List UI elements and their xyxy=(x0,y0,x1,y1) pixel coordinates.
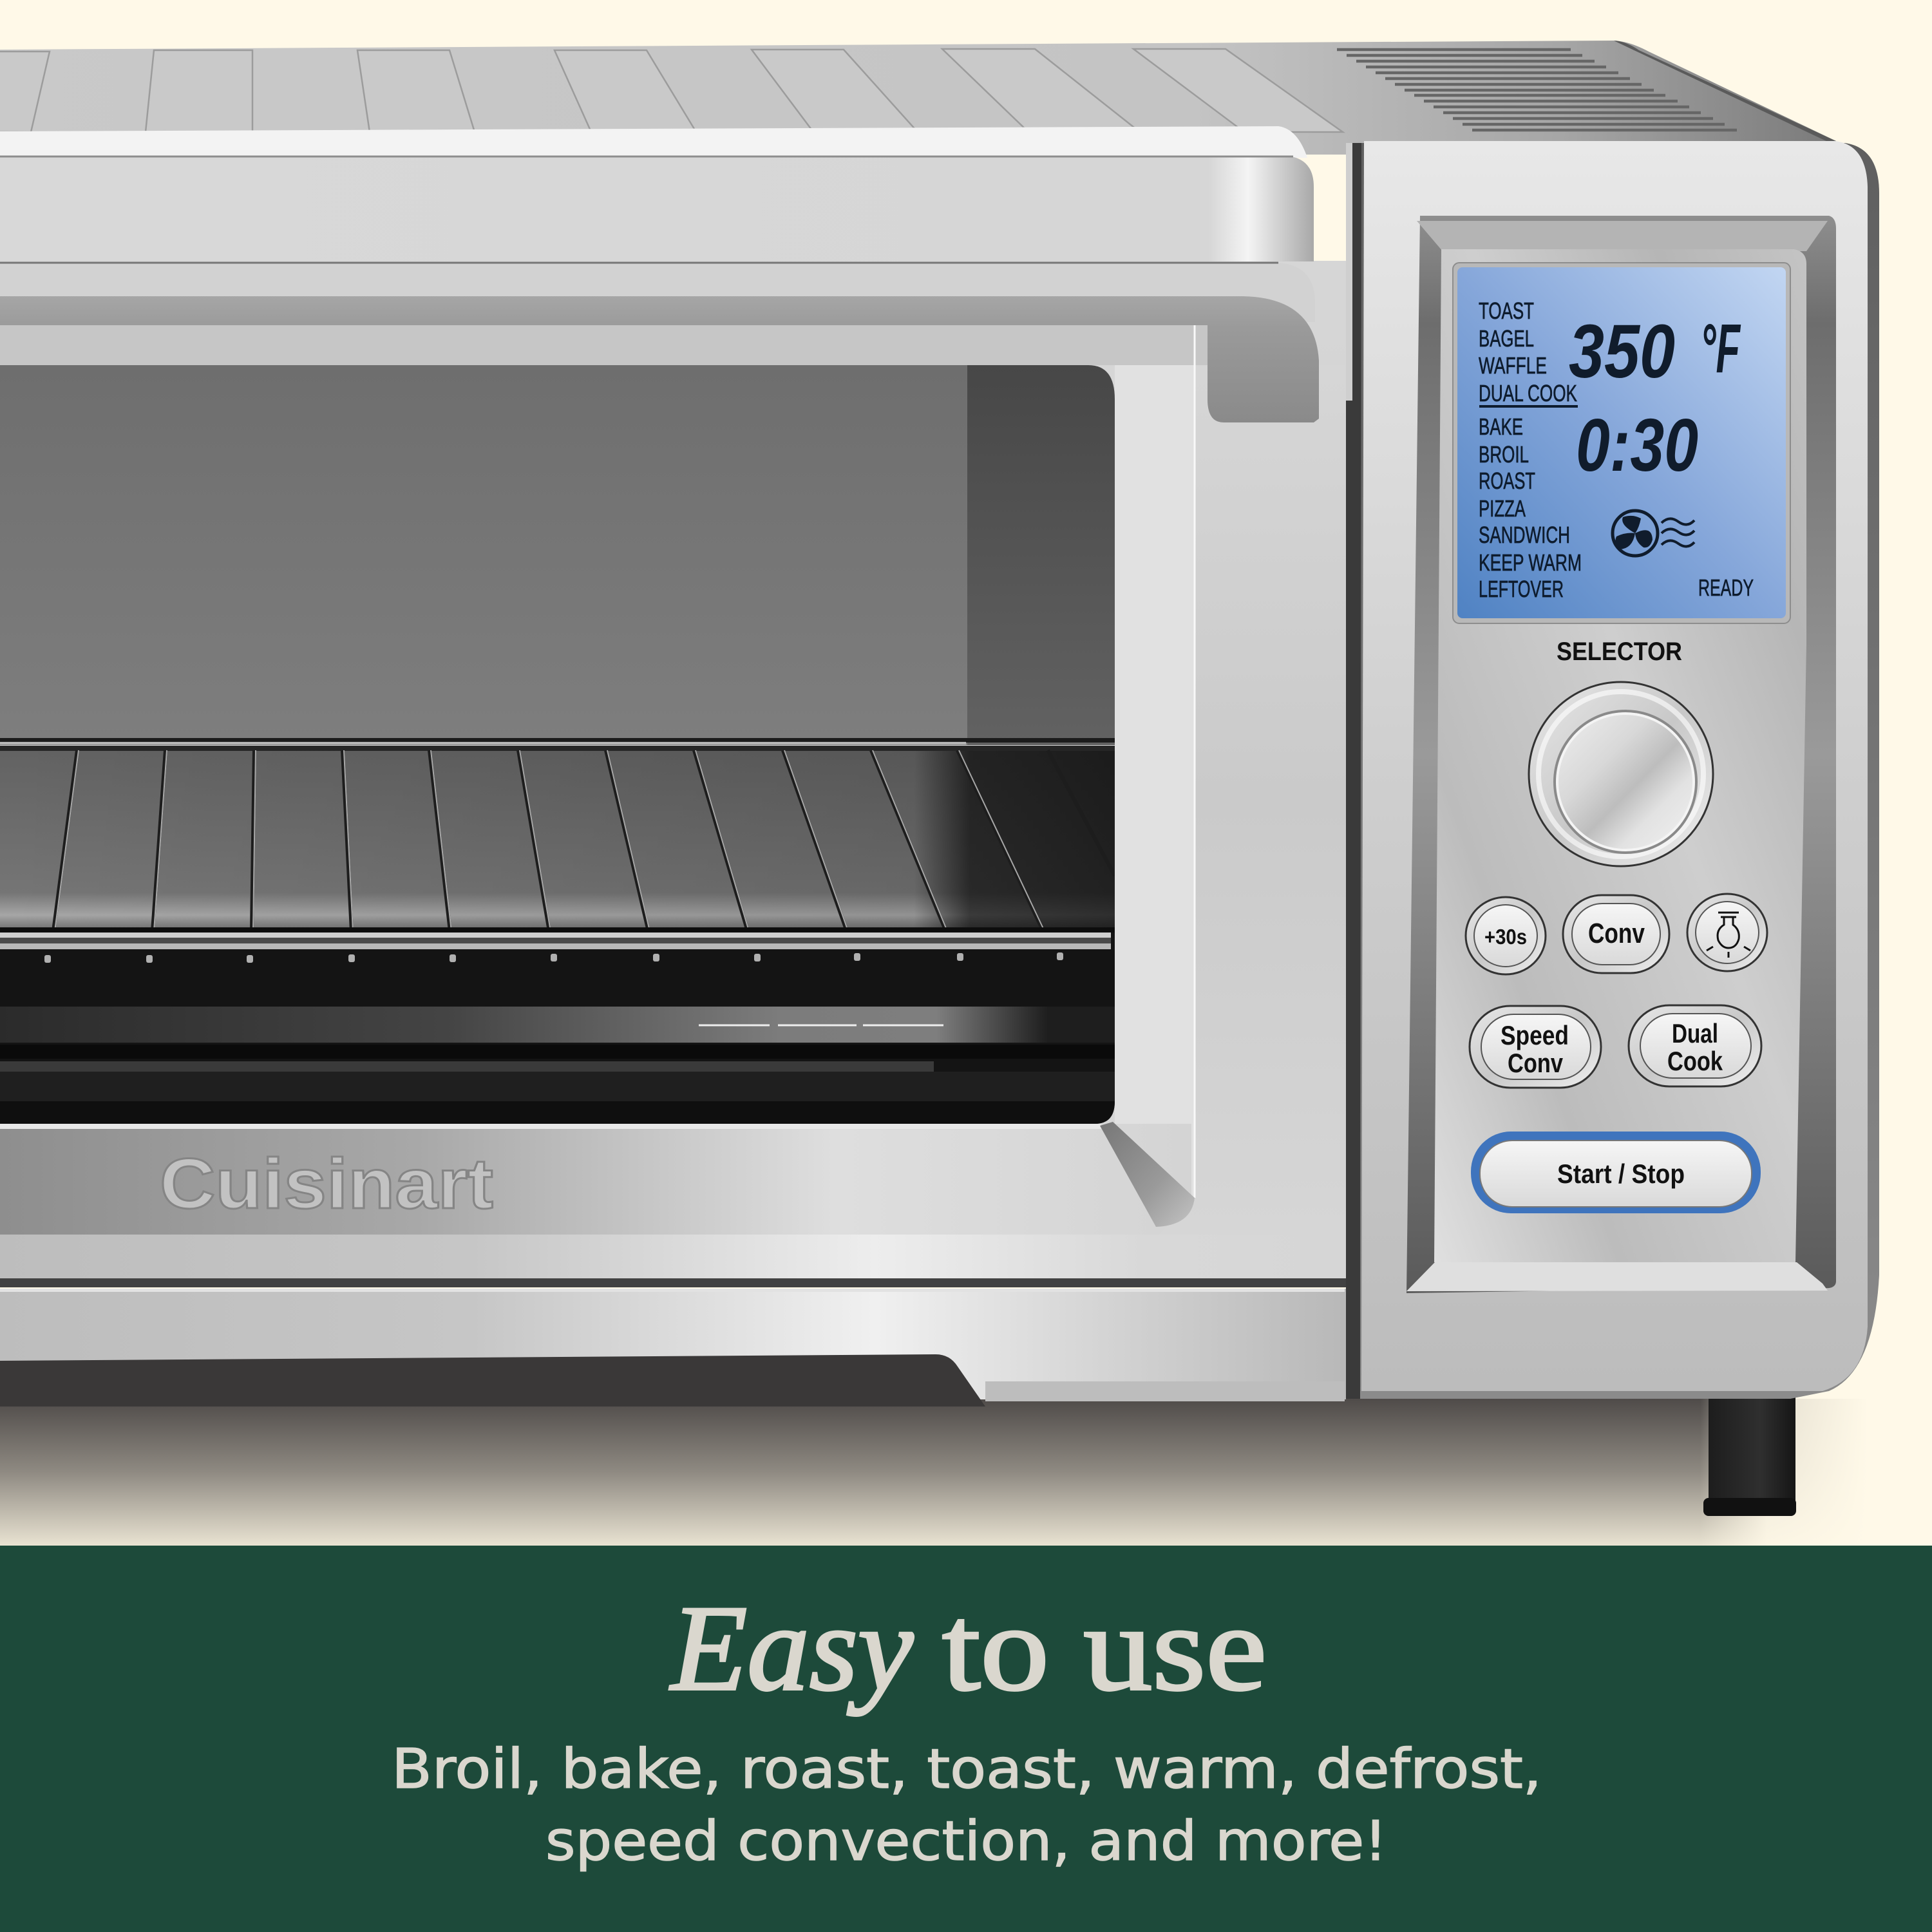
top vent slots xyxy=(1337,50,1737,130)
subtitle line 1: Broil, bake, roast, toast, warm, defrost, xyxy=(392,1738,1542,1801)
oven foot xyxy=(1703,1394,1796,1516)
dual cook underline xyxy=(1479,405,1578,408)
time readout: 0:30 xyxy=(1576,403,1698,487)
icon: light bulb xyxy=(1707,913,1750,958)
Cuisinart logo: Cuisinart xyxy=(160,1144,493,1224)
side wall xyxy=(967,365,1115,745)
LCD mode list: KEEP WARM xyxy=(1479,549,1582,576)
LCD mode list: TOAST xyxy=(1479,298,1534,324)
handle lip xyxy=(0,263,1315,322)
handle underside xyxy=(0,296,1319,422)
button: Dual Cook: Cook xyxy=(1667,1046,1723,1076)
ready label: READY xyxy=(1698,574,1754,601)
LCD mode list: SANDWICH xyxy=(1479,522,1570,548)
green caption band xyxy=(0,1546,1932,1932)
panel inner face xyxy=(1434,249,1806,1262)
control panel xyxy=(1360,141,1879,1399)
subtitle line 2: speed convection, and more! xyxy=(545,1810,1387,1873)
button: Conv: Conv xyxy=(1588,918,1645,949)
LCD bezel xyxy=(1453,263,1790,623)
LCD mode list: WAFFLE xyxy=(1479,352,1547,379)
rack back rod xyxy=(0,738,1115,751)
door handle xyxy=(0,126,1319,422)
heading: Easy xyxy=(669,1581,914,1716)
button: oven light xyxy=(1687,894,1767,971)
temperature readout: 350 xyxy=(1569,309,1675,394)
rack wires xyxy=(53,750,1115,931)
handle face xyxy=(0,156,1314,261)
heating element reflection xyxy=(0,1007,1115,1127)
LCD screen xyxy=(1457,267,1786,618)
button: Speed Conv: Speed xyxy=(1501,1020,1569,1050)
door lower band xyxy=(0,1278,1346,1406)
oven top surface xyxy=(0,41,1836,155)
handle top xyxy=(0,126,1307,158)
button: Speed Conv xyxy=(1470,1006,1601,1088)
heading: to use xyxy=(942,1581,1267,1716)
icon: convection fan xyxy=(1613,511,1658,556)
base recess xyxy=(0,1354,985,1406)
degree F readout: °F xyxy=(1700,309,1741,387)
button: +30s: +30s xyxy=(1484,925,1527,949)
LCD mode list: LEFTOVER xyxy=(1479,576,1564,602)
top ribs xyxy=(0,49,1343,132)
gap between door and panel xyxy=(1346,143,1361,1399)
selector knob xyxy=(1529,682,1713,866)
background xyxy=(0,0,1932,1546)
LCD mode list: ROAST xyxy=(1479,468,1535,494)
rack front rod xyxy=(0,927,1115,949)
selector label: SELECTOR xyxy=(1557,638,1682,666)
rack studs xyxy=(44,952,1063,963)
button: Dual Cook xyxy=(1629,1005,1761,1086)
door corner bevel xyxy=(1100,1122,1195,1227)
button: +30s xyxy=(1466,897,1546,974)
button: Start / Stop: Start / Stop xyxy=(1557,1159,1685,1189)
button: Dual Cook: Dual xyxy=(1672,1018,1718,1048)
LCD mode list: BAGEL xyxy=(1479,325,1534,352)
LCD mode list: PIZZA xyxy=(1479,495,1526,522)
door lower front panel xyxy=(0,322,1346,1278)
button: Speed Conv: Conv xyxy=(1508,1048,1564,1078)
oven shadow xyxy=(0,1399,1868,1546)
button: Start / Stop xyxy=(1471,1132,1761,1213)
panel outer xyxy=(1360,143,1879,1399)
icon: air waves xyxy=(1662,518,1694,547)
LCD mode list: BAKE xyxy=(1479,413,1523,440)
LCD mode list xyxy=(1479,298,1582,602)
oven window xyxy=(0,365,1115,1127)
back wall xyxy=(0,365,967,745)
button: Conv xyxy=(1563,895,1669,973)
LCD mode list: DUAL COOK xyxy=(1479,380,1577,406)
panel recess xyxy=(1406,216,1836,1293)
oven floor xyxy=(0,747,1115,934)
door body xyxy=(0,261,1346,1285)
LCD mode list: BROIL xyxy=(1479,441,1529,468)
lower dark area xyxy=(0,933,1115,1126)
